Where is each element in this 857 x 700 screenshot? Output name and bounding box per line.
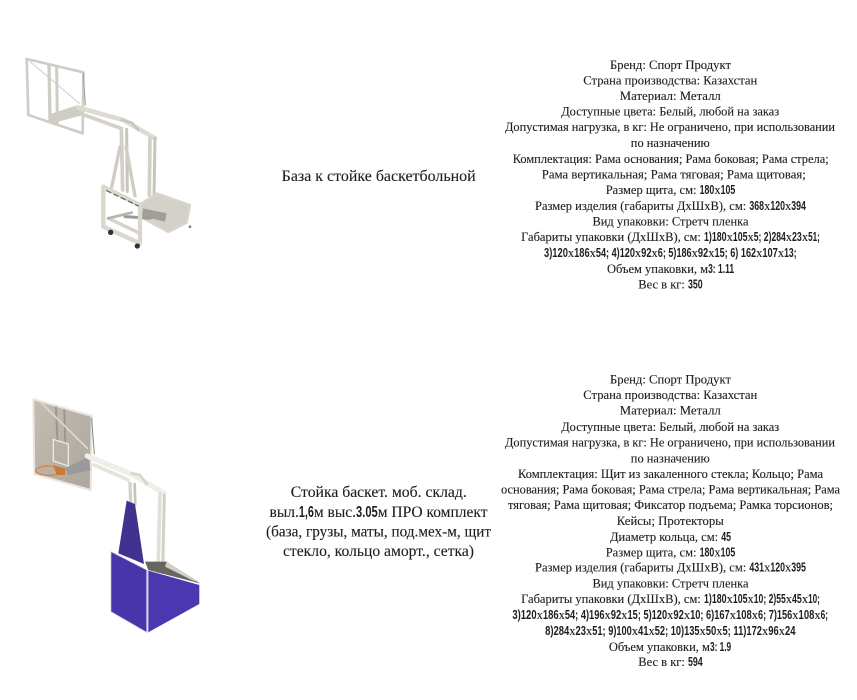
boom arms (78, 108, 155, 138)
spec list: complete stand: Размер изделия (габариты ДxШxВ), см: 431x120x395 (535, 560, 806, 574)
spec list: complete stand: Допустимая нагрузка, в кг: Не ограничено, при использовании (505, 436, 835, 450)
spec list: base: Размер щита, см: 180x105 (606, 183, 735, 197)
spec list: complete stand: Размер щита, см: 180x105 (606, 546, 735, 560)
spec list: complete stand: 3)120x186x54; 4)196x92x15; 5)120x92x10; 6)167x108x6; 7)156x108x6; (512, 608, 828, 622)
product title: complete stand: Стойка баскет. моб. склад. (291, 484, 467, 501)
product title: complete stand (266, 484, 491, 560)
spec list: base (505, 58, 835, 292)
spec list: complete stand: Габариты упаковки (ДxШxВ), см: 1)180x105x10; 2)55x45x10; (521, 592, 820, 606)
spec list: base: Материал: Металл (620, 89, 721, 103)
spec list: complete stand: основания; Рама боковая; Рама стрела; Рама вертикальная; Рама (501, 482, 840, 496)
spec list: base: по назначению (631, 136, 710, 150)
spec list: base: Допустимая нагрузка, в кг: Не ограничено, при использовании (505, 120, 835, 134)
spec list: base: Вид упаковки: Стретч пленка (592, 214, 749, 228)
spec list: base: Рама вертикальная; Рама тяговая; Рама щитовая; (542, 168, 806, 182)
spec list: complete stand: Кейсы; Протекторы (617, 514, 724, 528)
spec list: complete stand: Комплектация: Щит из закаленного стекла; Кольцо; Рама (518, 467, 823, 481)
spec list: base: Объем упаковки, м3: 1.11 (607, 262, 734, 276)
spec list: base: Бренд: Спорт Продукт (610, 58, 732, 72)
product title: complete stand: выл.1,6м выс.3.05м ПРО комплект (270, 504, 488, 521)
product title: complete stand: стекло, кольцо аморт., сетка) (283, 543, 474, 560)
spec list: complete stand: Бренд: Спорт Продукт (610, 372, 732, 386)
spec list: complete stand: тяговая; Рама щитовая; Фиксатор подъема; Рамка торсионов; (508, 498, 833, 512)
spec list: base: Страна производства: Казахстан (583, 74, 758, 88)
backboard frame (27, 59, 85, 133)
product title: base: База к стойке баскетбольной (282, 168, 476, 185)
orange hoop (36, 465, 65, 475)
spec list: base: Размер изделия (габариты ДxШxВ), см: 368x120x394 (535, 199, 806, 213)
spec list: complete stand: 8)284x23x51; 9)100x41x52; 10)135x50x5; 11)172x96x24 (545, 624, 796, 638)
product image: basketball stand base (27, 59, 191, 249)
spec list: base: 3)120x186x54; 4)120x92x6; 5)186x92x15; 6) 162x107x13; (544, 246, 797, 260)
columns and A-frame (112, 128, 155, 196)
glass backboard (33, 399, 94, 490)
spec list: base: Комплектация: Рама основания; Рама боковая; Рама стрела; (513, 152, 829, 166)
product image: complete basketball stand (33, 399, 200, 632)
boom arm and columns (87, 456, 164, 573)
spec list: complete stand (501, 372, 840, 669)
spec list: base: Вес в кг: 350 (638, 278, 703, 292)
spec list: complete stand: по назначению (631, 452, 710, 466)
spec list: complete stand: Вид упаковки: Стретч пленка (592, 576, 749, 590)
spec list: complete stand: Диаметр кольца, см: 45 (610, 530, 731, 544)
spec list: complete stand: Материал: Металл (620, 404, 721, 418)
spec list: complete stand: Объем упаковки, м3: 1.9 (609, 640, 731, 654)
spec list: complete stand: Страна производства: Казахстан (583, 388, 758, 402)
wheeled base with tray (103, 187, 191, 249)
spec list: base: Габариты упаковки (ДxШxВ), см: 1)180x105x5; 2)284x23x51; (521, 230, 820, 244)
spec list: complete stand: Вес в кг: 594 (638, 655, 703, 669)
spec list: complete stand: Доступные цвета: Белый, любой на заказ (561, 420, 779, 434)
spec list: base: Доступные цвета: Белый, любой на заказ (561, 104, 779, 118)
purple protector panels (111, 501, 200, 632)
product title: complete stand: (база, грузы, маты, под.мех-м, щит (266, 524, 491, 540)
